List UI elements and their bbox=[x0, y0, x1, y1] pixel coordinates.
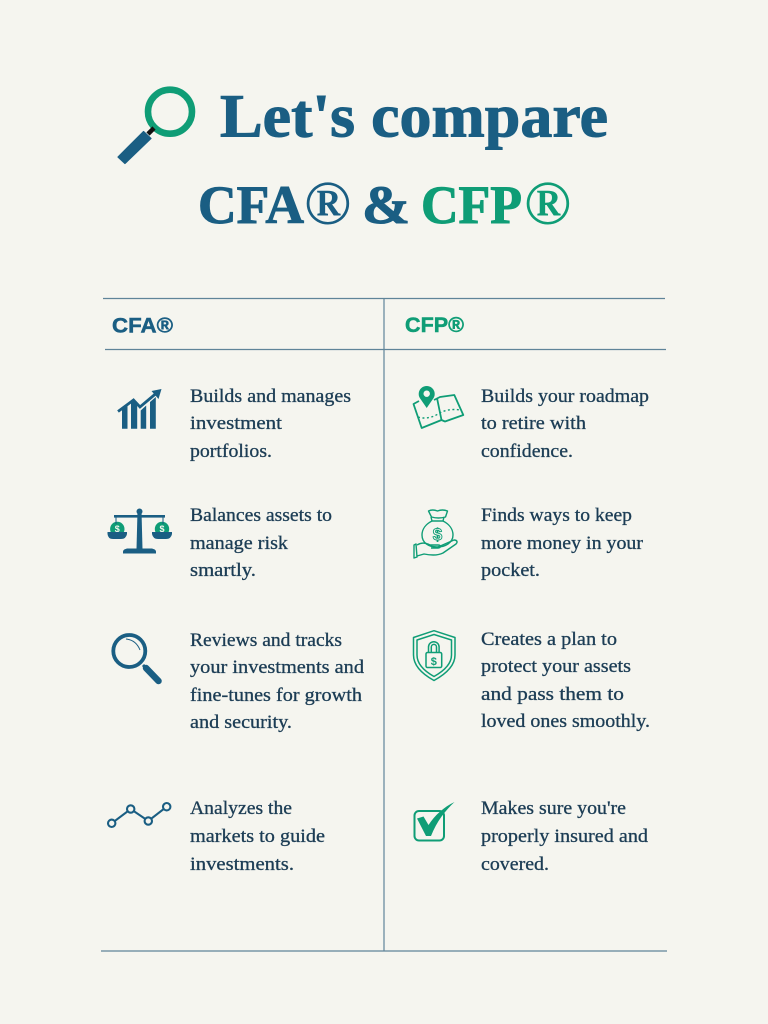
text: insurance: Makes sure you're bbox=[481, 798, 626, 819]
text: builds roadmap: confidence. bbox=[481, 441, 573, 462]
title: & bbox=[362, 175, 410, 235]
title: ® bbox=[524, 170, 571, 238]
icon: market line chart bbox=[108, 803, 170, 827]
icon: shield with lock bbox=[414, 631, 455, 680]
text: reviews investments: your investments and bbox=[190, 657, 365, 678]
text: keeps money bbox=[481, 505, 644, 581]
text: insurance: covered. bbox=[481, 854, 549, 875]
column heading: CFP: CFP® bbox=[405, 314, 465, 337]
text: balances assets: manage risk bbox=[190, 533, 289, 554]
text: creates plan: protect your assets bbox=[481, 656, 631, 677]
text: reviews investments bbox=[190, 630, 365, 733]
text: balances assets: smartly. bbox=[190, 560, 256, 581]
text: builds portfolios: investment bbox=[190, 413, 283, 434]
text: analyzes markets: Analyzes the bbox=[190, 798, 292, 819]
text: balances assets: Balances assets to bbox=[190, 505, 332, 526]
column heading: CFA: CFA® bbox=[112, 314, 174, 338]
text: creates plan: Creates a plan to bbox=[481, 629, 617, 650]
text: builds roadmap: to retire with bbox=[481, 413, 587, 434]
icon: magnifying glass bbox=[113, 635, 158, 681]
title: CFA bbox=[198, 175, 304, 235]
icon: money bag in hand bbox=[414, 510, 457, 558]
icon: map with pin bbox=[414, 386, 463, 428]
text: insurance: properly insured and bbox=[481, 826, 649, 847]
text: analyzes markets bbox=[190, 798, 325, 875]
text: keeps money: pocket. bbox=[481, 560, 540, 581]
icon: checkbox with tick bbox=[414, 802, 454, 840]
text: reviews investments: and security. bbox=[190, 712, 292, 733]
text: creates plan: loved ones smoothly. bbox=[481, 711, 650, 732]
text: insurance bbox=[481, 798, 649, 875]
icon: growth bar chart bbox=[118, 389, 162, 429]
text: analyzes markets: investments. bbox=[190, 854, 294, 875]
title bbox=[198, 84, 608, 238]
text: balances assets bbox=[190, 505, 332, 581]
text: builds roadmap: Builds your roadmap bbox=[481, 386, 649, 407]
text: analyzes markets: markets to guide bbox=[190, 826, 325, 847]
text: creates plan bbox=[481, 629, 650, 732]
text: builds portfolios: portfolios. bbox=[190, 441, 272, 462]
text: reviews investments: fine-tunes for growth bbox=[190, 685, 363, 706]
text: builds portfolios: Builds and manages bbox=[190, 386, 351, 407]
text: builds portfolios bbox=[190, 386, 351, 462]
text: creates plan: and pass them to bbox=[481, 684, 624, 705]
text: keeps money: more money in your bbox=[481, 533, 644, 554]
icon: money bag in hand: $ bbox=[433, 525, 443, 544]
icon: balance scale bbox=[108, 508, 172, 554]
icon: balance scale: $ bbox=[159, 524, 165, 534]
title: ® bbox=[304, 170, 351, 238]
icon: title magnifying glass bbox=[118, 90, 192, 164]
icon: shield with lock: $ bbox=[431, 656, 437, 668]
icon: balance scale: $ bbox=[115, 524, 120, 534]
text: keeps money: Finds ways to keep bbox=[481, 505, 632, 526]
text: builds roadmap bbox=[481, 386, 649, 462]
title: CFP bbox=[421, 175, 522, 235]
title: Let's compare bbox=[220, 84, 608, 150]
text: reviews investments: Reviews and tracks bbox=[190, 630, 342, 651]
